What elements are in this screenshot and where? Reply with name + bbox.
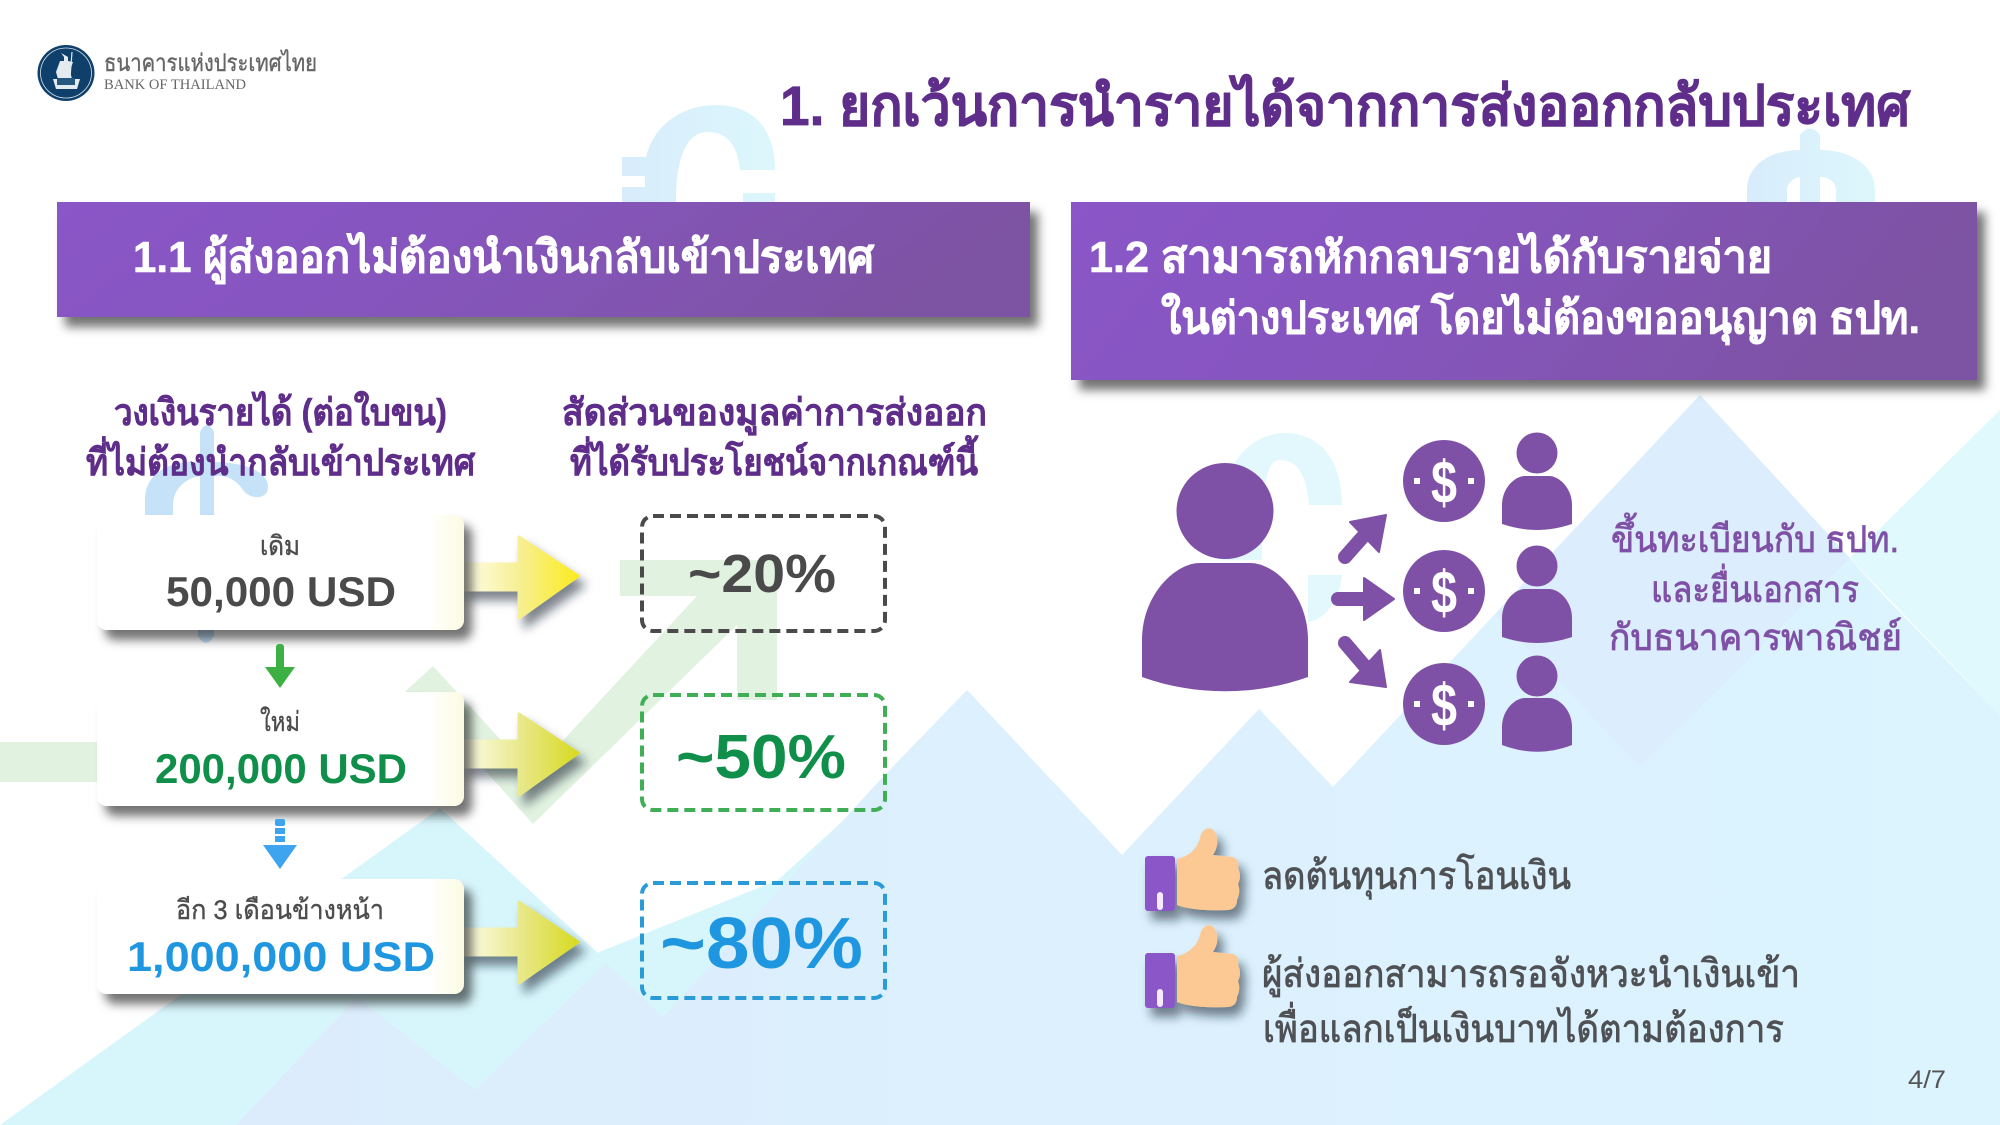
icon: thumbs up 1 [1145, 828, 1240, 911]
column heading: export share: ที่ได้รับประโยชน์จากเกณฑ์นี้ [570, 435, 979, 483]
logo: Bank of Thailand: ธนาคารแห่งประเทศไทย [104, 49, 317, 77]
card: original limit [97, 515, 464, 630]
panel heading 1.2: ในต่างประเทศ โดยไม่ต้องขออนุญาต ธปท. [1161, 291, 1920, 346]
logo: Bank of Thailand [38, 45, 317, 101]
icon: arrow right [1338, 578, 1394, 620]
dashed box: 80 percent: ~80% [660, 904, 863, 984]
icon: arrow down right [1345, 643, 1386, 687]
column heading: export share: สัดส่วนของมูลค่าการส่งออก [562, 392, 987, 436]
panel heading 1.1 [57, 202, 1030, 317]
icon: coin 3: $ [1431, 672, 1457, 739]
column heading: income limit: วงเงินรายได้ (ต่อใบขน) [114, 390, 447, 433]
arrow: green down [265, 644, 295, 688]
panel heading 1.2 [1071, 202, 1977, 380]
icon: small person 3 [1502, 656, 1572, 752]
dashed box: 50 percent [642, 695, 885, 810]
card: original limit: เดิม [260, 531, 300, 561]
card: new limit: 200,000 USD [155, 745, 407, 792]
icon: thumbs up 2 [1145, 925, 1240, 1008]
arrow: blue dashed down [263, 819, 297, 869]
icon: small person 2 [1502, 546, 1572, 643]
icon: exporter with coins and counterparties [1142, 432, 1572, 752]
dashed box: 20 percent: ~20% [688, 544, 836, 604]
icon: coin 2 [1403, 550, 1485, 632]
icon: arrow up right [1345, 515, 1386, 557]
arrow: yellow 2 [464, 714, 578, 795]
card: new limit: ใหม่ [260, 706, 300, 737]
text: exporters can time conversion: เพื่อแลกเป็นเงินบาทได้ตามต้องการ [1263, 1002, 1784, 1051]
text: reduce transfer cost: ลดต้นทุนการโอนเงิน [1262, 854, 1571, 900]
title: 1. ยกเว้นการนำรายได้จากการส่งออกกลับประเทศ [780, 73, 1911, 137]
dashed box: 50 percent: ~50% [676, 723, 846, 792]
card: new limit [97, 692, 464, 806]
icon: coin 1 [1403, 440, 1485, 522]
arrow: yellow 1 [464, 537, 578, 618]
dashed box: 20 percent [642, 516, 885, 631]
panel heading 1.2: 1.2 สามารถหักกลบรายได้กับรายจ่าย [1089, 231, 1772, 282]
panel heading 1.1: 1.1 ผู้ส่งออกไม่ต้องนำเงินกลับเข้าประเทศ [133, 231, 875, 284]
logo: Bank of Thailand: BANK OF THAILAND [104, 77, 246, 93]
arrow: yellow 3 [464, 902, 578, 983]
text: register with BOT: และยื่นเอกสาร [1651, 563, 1859, 610]
text: exporters can time conversion [1262, 953, 1800, 1051]
text: register with BOT [1609, 512, 1902, 658]
column heading: income limit: ที่ไม่ต้องนำกลับเข้าประเทศ [86, 436, 475, 483]
card: limit in 3 months: 1,000,000 USD [127, 933, 435, 980]
dashed box: 80 percent [642, 883, 885, 998]
card: limit in 3 months: อีก 3 เดือนข้างหน้า [176, 895, 384, 925]
column heading: export share [562, 392, 987, 483]
column heading: income limit [86, 390, 475, 483]
text: register with BOT: ขึ้นทะเบียนกับ ธปท. [1611, 512, 1899, 560]
text: exporters can time conversion: ผู้ส่งออกสามารถรอจังหวะนำเงินเข้า [1262, 953, 1800, 997]
icon: coin 1: $ [1431, 449, 1457, 516]
icon: coin 3 [1403, 663, 1485, 745]
icon: small person 1 [1502, 432, 1572, 530]
icon: coin 2: $ [1431, 559, 1457, 626]
card: limit in 3 months [97, 879, 464, 994]
text: register with BOT: กับธนาคารพาณิชย์ [1609, 617, 1902, 658]
page number: 4/7 [1908, 1066, 1946, 1094]
card: original limit: 50,000 USD [166, 568, 396, 615]
icon: large person [1142, 463, 1308, 691]
